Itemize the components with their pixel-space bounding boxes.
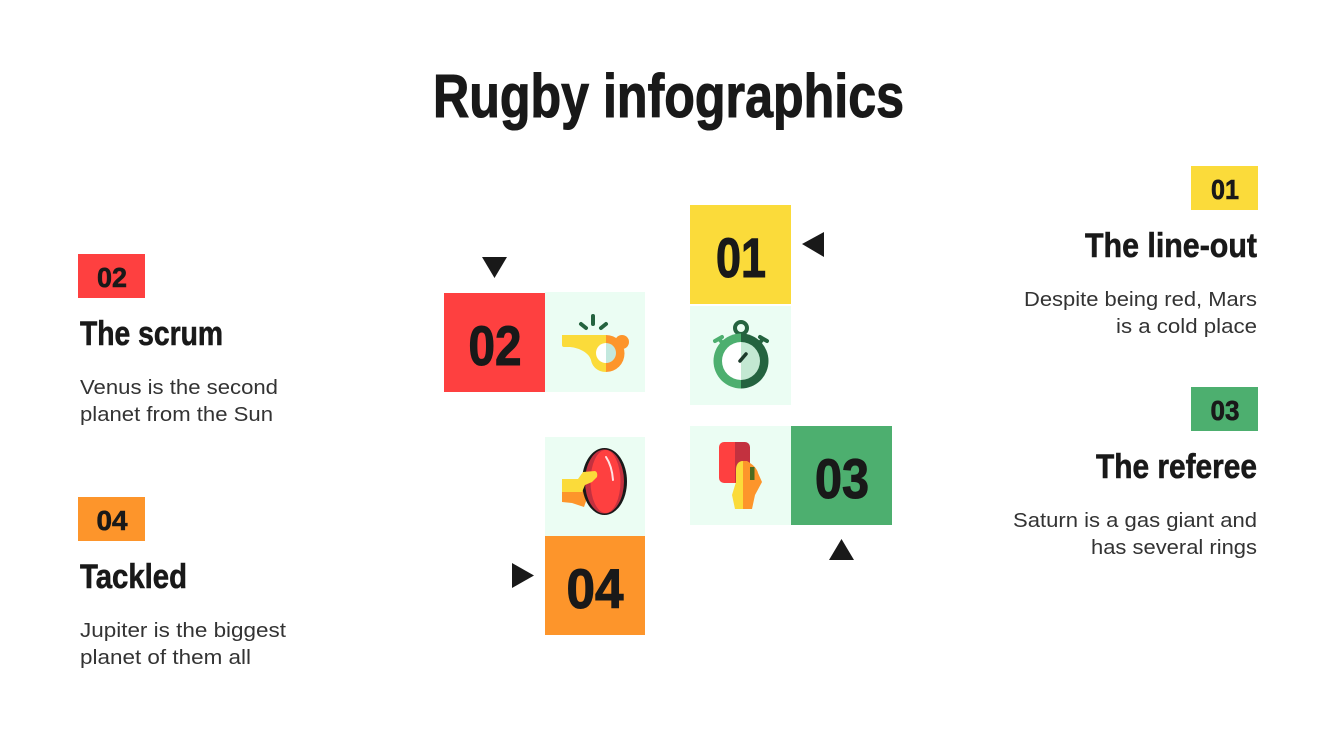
tag 03: 03: [1210, 395, 1240, 426]
number block 01: [690, 205, 791, 304]
panel: 01 the line-out text: [1024, 166, 1258, 338]
heading: the referee: The referee: [1096, 448, 1257, 486]
arrow: 02: [482, 257, 507, 278]
heading: tackled: Tackled: [80, 558, 187, 596]
arrow: 03: [829, 539, 854, 560]
heading: the line-out: The line-out: [1085, 227, 1257, 265]
icon: whistle: [545, 292, 645, 392]
number block 02: 02: [468, 314, 522, 377]
number block 03: 03: [815, 447, 869, 510]
text: line-out description: is a cold place: [1116, 315, 1257, 338]
tag 04: [78, 497, 145, 541]
number block 04: 04: [566, 557, 624, 620]
text: scrum description: Venus is the second: [80, 376, 278, 399]
title: Rugby infographics: [433, 62, 904, 130]
panel: 03 the referee text: [1013, 387, 1258, 559]
text: tackled description: Jupiter is the biggest: [80, 619, 286, 642]
text: tackled description: [80, 619, 286, 669]
arrow: 04: [512, 563, 534, 588]
text: scrum description: [80, 376, 278, 426]
number block 04: [545, 536, 645, 635]
text: line-out description: Despite being red, Mars: [1024, 288, 1257, 311]
text: referee description: has several rings: [1091, 536, 1257, 559]
tag 02: [78, 254, 145, 298]
panel: 04 tackled text: [78, 497, 286, 669]
number block 02: [444, 293, 545, 392]
panel: 02 the scrum text: [78, 254, 278, 426]
icon: red card in hand: [690, 426, 791, 525]
text: referee description: [1013, 509, 1257, 559]
number block 01: 01: [716, 226, 766, 289]
tag 03: [1191, 387, 1258, 431]
text: scrum description: planet from the Sun: [80, 403, 273, 426]
heading: the scrum: The scrum: [80, 315, 223, 353]
text: referee description: Saturn is a gas giant and: [1013, 509, 1257, 532]
text: tackled description: planet of them all: [80, 646, 251, 669]
arrow: 01: [802, 232, 824, 257]
tag 01: [1191, 166, 1258, 210]
icon: stopwatch: [690, 306, 791, 405]
tag 01: 01: [1211, 174, 1239, 205]
tag 02: 02: [97, 262, 127, 293]
text: line-out description: [1024, 288, 1257, 338]
icon: hand holding ball: [545, 437, 645, 536]
number block 03: [791, 426, 892, 525]
tag 04: 04: [96, 505, 128, 536]
